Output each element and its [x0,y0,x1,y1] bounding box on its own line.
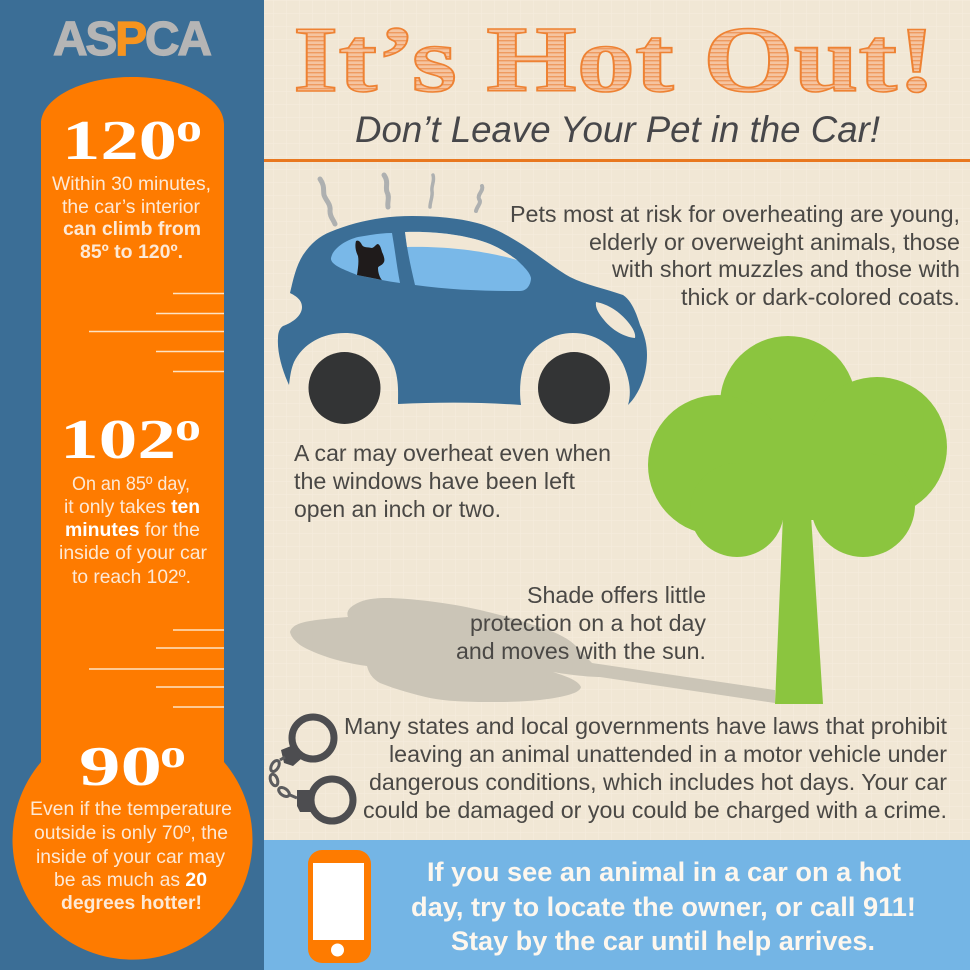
reading: 102 degrees: minutes for the [65,519,200,541]
text: windows [294,440,611,522]
call to action text: Stay by the car until help arrives. [451,926,875,956]
text: laws: could be damaged or you could be charged with a crime. [363,797,947,823]
dog silhouette [355,241,384,280]
text: pets at risk: thick or dark-colored coats. [681,284,960,310]
chain [269,757,297,798]
top cuff [292,717,334,759]
car body [278,216,647,405]
text: laws: Many states and local governments have laws that prohibit [344,713,948,739]
panel: call to action [264,840,970,970]
text: windows: A car may overheat even when [294,440,611,466]
text: windows: the windows have been left [294,468,576,494]
call to action text [411,857,916,956]
reading: 90 degrees: 90 [79,736,162,798]
call to action text: day, try to locate the owner, or call 911! [411,892,916,922]
icon: handcuffs [269,717,353,821]
reading: 120 degrees: the car’s interior [62,196,200,218]
rear wheel [308,352,380,424]
reading: 120 degrees [52,105,211,263]
text: laws: dangerous conditions, which includes hot days. Your car [369,769,947,795]
reading: 120 degrees: Within 30 minutes, [52,173,211,195]
icon: heat waves [320,175,482,224]
logo: ASPCA: ASPCA [53,13,212,66]
text: shade: Shade offers little [527,582,706,608]
reading: 102 degrees: inside of your car [59,542,207,564]
call to action background [264,840,970,970]
subtitle: Don’t Leave Your Pet in the Car! [355,109,880,150]
car rear window [331,233,400,283]
reading: 90 degrees: degrees hotter! [61,892,202,914]
bottom cuff [311,779,353,821]
reading: 90 degrees [30,731,232,914]
icon: phone [308,850,371,963]
heading rule [264,159,970,162]
reading: 90 degrees: outside is only 70º, the [34,822,228,844]
reading: 102 degrees: On an 85º day, [72,473,190,495]
reading: 120 degrees: can climb from [63,218,201,240]
reading: 102 degrees: it only takes ten [64,496,200,518]
text: pets at risk [510,201,960,310]
car front window [405,232,531,291]
tree shadow [290,598,775,703]
reading: 120 degrees: o [176,105,202,150]
text: laws: leaving an animal unattended in a motor vehicle under [389,741,947,767]
text: pets at risk: elderly or overweight animals, those [589,229,960,255]
reading: 102 degrees: o [175,404,201,449]
reading: 120 degrees: 85º to 120º. [80,241,183,263]
thermometer body [12,77,253,960]
title: It’s Hot Out! [293,8,936,112]
text: windows: open an inch or two. [294,496,501,522]
reading: 102 degrees: to reach 102º. [72,566,191,588]
reading: 102 degrees [59,404,207,588]
thermometer [12,77,253,960]
reading: 90 degrees: o [160,731,186,776]
text: shade [456,582,707,664]
reading: 120 degrees: 120 [62,110,177,172]
front wheel [538,352,610,424]
thermometer ticks: upper [89,294,224,372]
reading: 90 degrees: Even if the temperature [30,798,232,820]
reading: 90 degrees: be as much as 20 [54,869,207,891]
icon: car [278,216,647,424]
thermometer ticks: lower [89,630,224,707]
panel: left sidebar [0,0,264,970]
text: pets at risk: Pets most at risk for overheating are young, [510,201,960,227]
car window glare [405,232,517,260]
reading: 102 degrees: 102 [60,409,176,471]
text: laws [344,713,948,823]
text: shade: protection on a hot day [470,610,707,636]
text: shade: and moves with the sun. [456,638,706,664]
call to action text: If you see an animal in a car on a hot [427,857,901,887]
icon: tree [648,336,947,704]
text: pets at risk: with short muzzles and those with [611,256,960,282]
car headlight [596,302,635,338]
reading: 90 degrees: inside of your car may [36,846,225,868]
